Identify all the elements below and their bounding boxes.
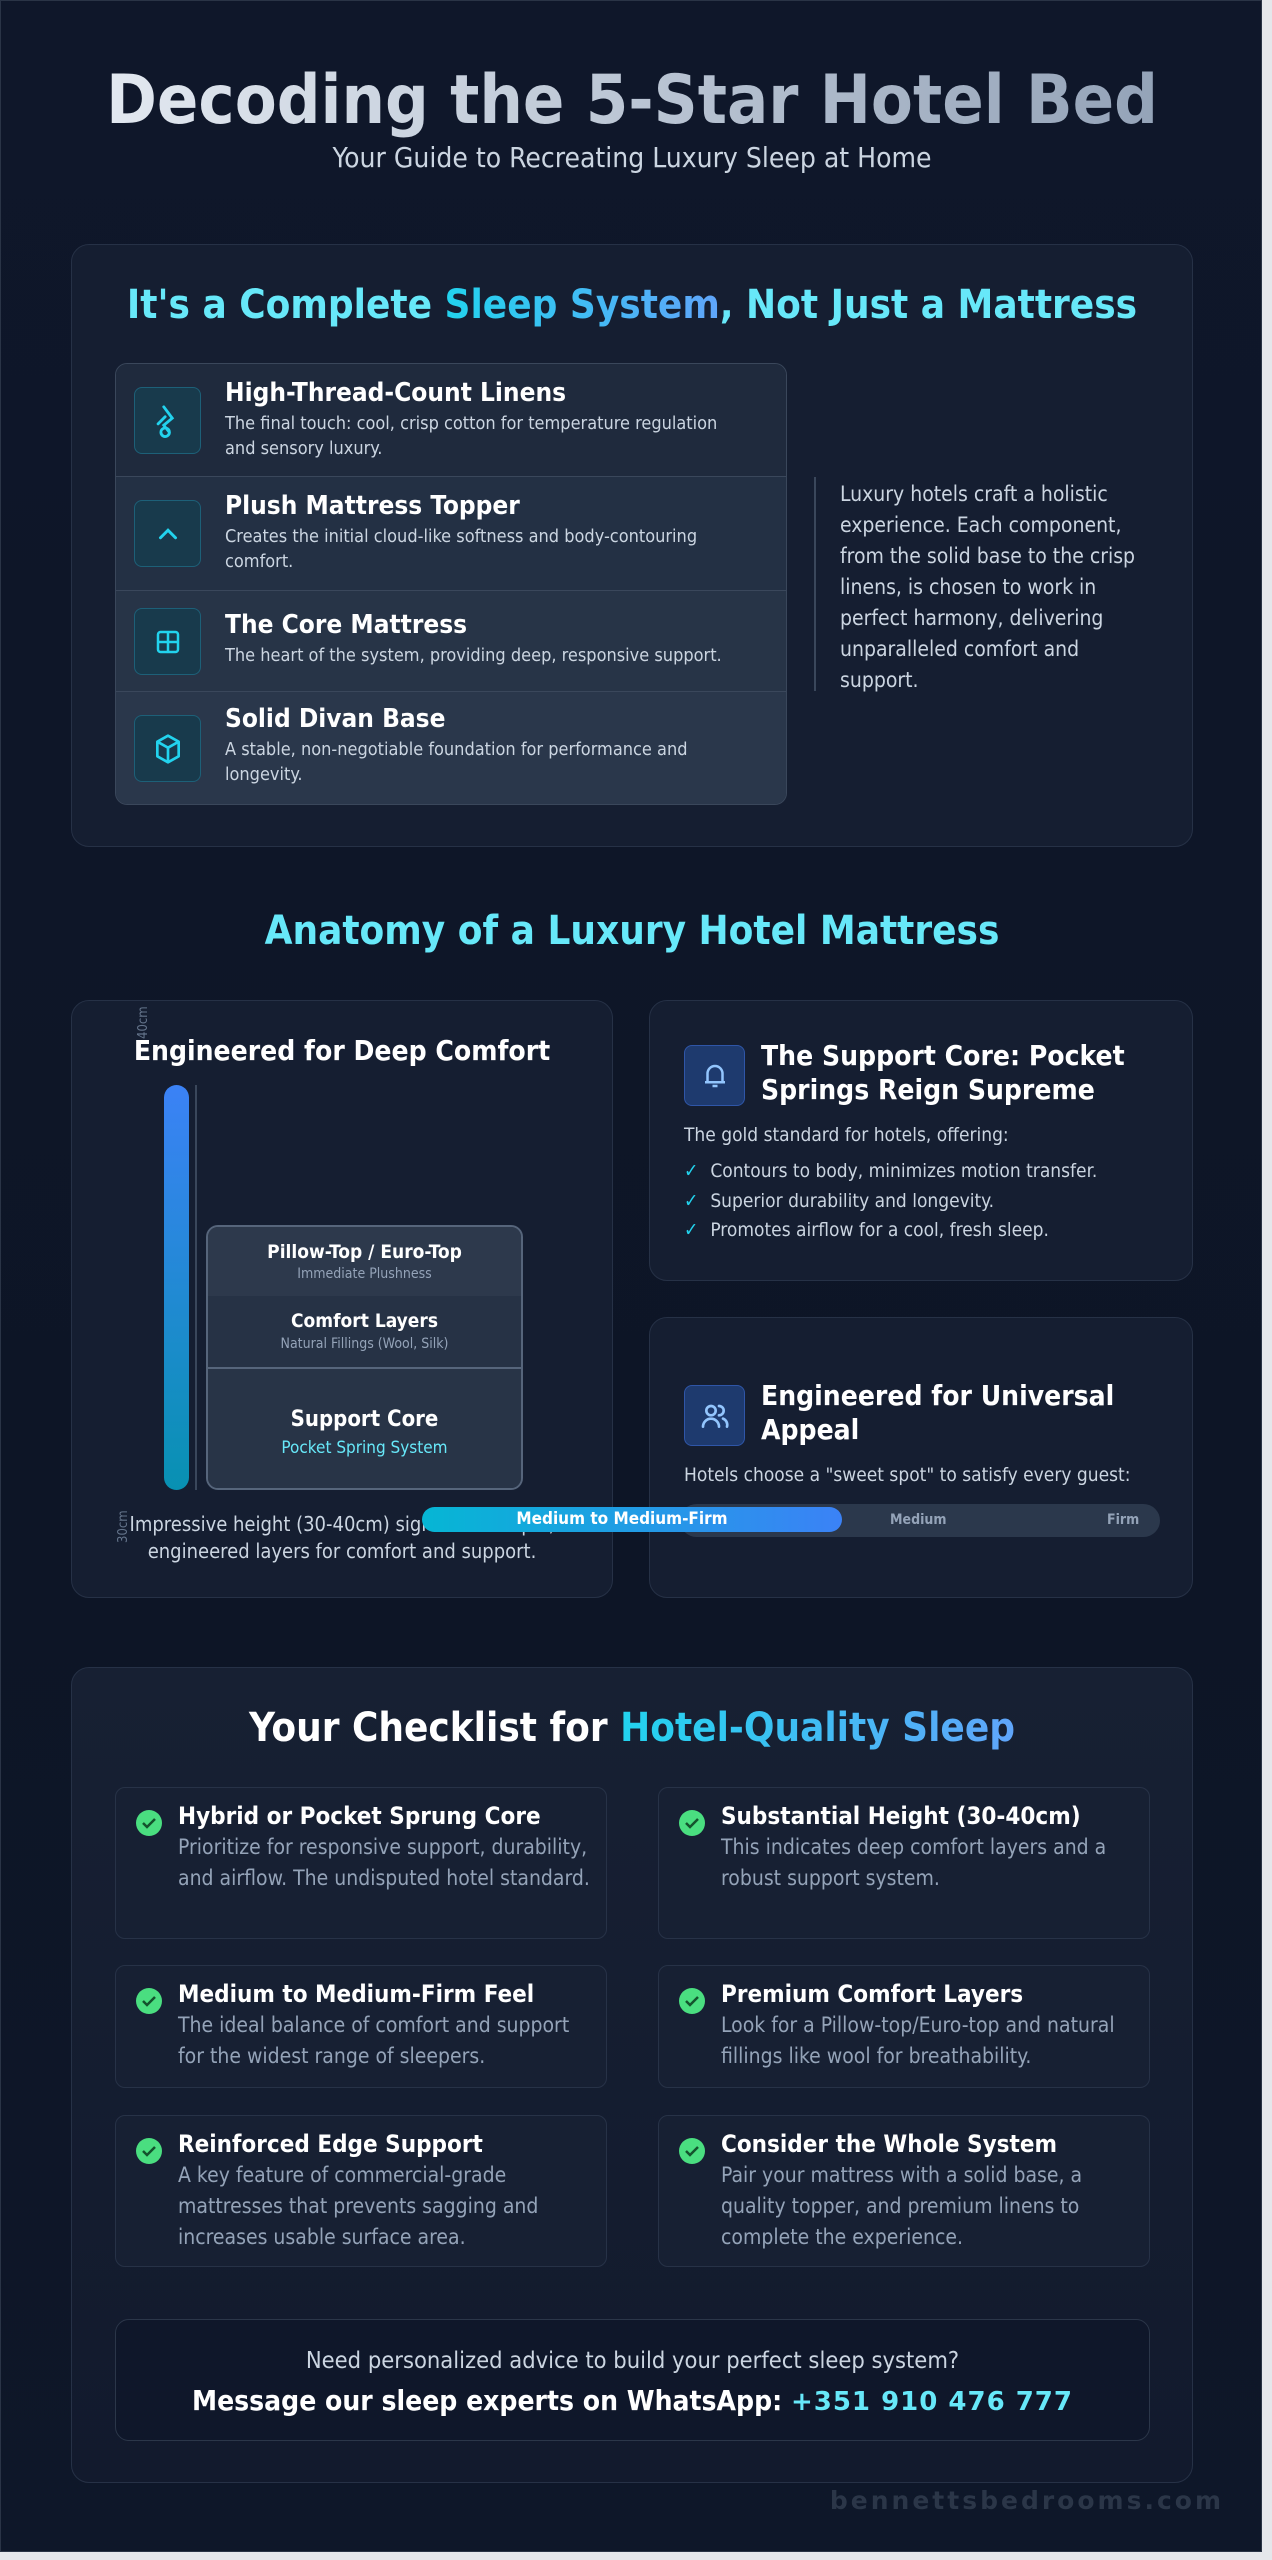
layer list bbox=[115, 363, 787, 805]
item: comfort layers: Premium Comfort Layers bbox=[721, 1980, 1023, 2008]
caption: Impressive height (30-40cm) signifies multiple, engineered layers for comfort and support. bbox=[130, 1512, 554, 1563]
item: comfort layers: Look for a Pillow-top/Euro-top and natural fillings like wool for breathability. bbox=[721, 2013, 1115, 2068]
heading: support core: The Support Core: Pocket Springs Reign Supreme bbox=[761, 1039, 1125, 1106]
text: sweet spot: Hotels choose a "sweet spot" to satisfy every guest: bbox=[684, 1464, 1130, 1486]
heading: checklist: Your Checklist for Hotel-Quality Sleep bbox=[249, 1705, 1015, 1751]
row: core mattress: The heart of the system, providing deep, responsive support. bbox=[225, 645, 722, 666]
row: linens: High-Thread-Count Linens bbox=[225, 378, 566, 408]
item: hybrid core: Hybrid or Pocket Sprung Core bbox=[178, 1802, 541, 1830]
watermark: bennettsbedrooms.com bbox=[830, 2486, 1224, 2515]
callout: whatsapp: Need personalized advice to build your perfect sleep system? bbox=[306, 2346, 959, 2374]
row: divan: Solid Divan Base bbox=[225, 704, 445, 734]
heading: anatomy: Anatomy of a Luxury Hotel Mattress bbox=[265, 908, 999, 954]
row: topper bbox=[116, 477, 786, 591]
item: feel bbox=[115, 1965, 607, 2088]
firmness track bbox=[680, 1504, 1160, 1537]
icon: bell bbox=[684, 1045, 745, 1106]
row: core mattress: The Core Mattress bbox=[225, 610, 467, 640]
item: whole system: Consider the Whole System bbox=[721, 2130, 1057, 2158]
item: edge support: A key feature of commercial-grade mattresses that prevents sagging and increases usable surface area. bbox=[178, 2163, 538, 2249]
firmness track: Firm bbox=[1107, 1512, 1139, 1528]
checklist: benefits bbox=[684, 1160, 1097, 1241]
label: 40cm: 40cm bbox=[136, 1006, 151, 1039]
item: height: Substantial Height (30-40cm) bbox=[721, 1802, 1081, 1830]
layer: comfort: Comfort Layers bbox=[291, 1310, 438, 1332]
checklist: benefits: ✓ Contours to body, minimizes motion transfer. bbox=[684, 1160, 1097, 1182]
row: core mattress bbox=[116, 591, 786, 692]
subtitle: Your Guide to Recreating Luxury Sleep at Home bbox=[332, 141, 932, 174]
checklist: benefits: ✓ Promotes airflow for a cool, fresh sleep. bbox=[684, 1219, 1049, 1241]
panel: support core bbox=[649, 1000, 1193, 1281]
item: height: This indicates deep comfort layers and a robust support system. bbox=[721, 1835, 1106, 1890]
text: holistic experience: Luxury hotels craft a holistic experience. Each component, from the solid base to the crisp linens, is chosen to work in perfect harmony, delivering unparalleled comfort and support. bbox=[840, 482, 1135, 692]
heading: universal appeal: Engineered for Universal Appeal bbox=[761, 1379, 1114, 1446]
row: linens bbox=[116, 364, 786, 477]
callout: whatsapp: Message our sleep experts on WhatsApp: +351 910 476 777 bbox=[192, 2384, 1073, 2417]
row: topper: Plush Mattress Topper bbox=[225, 491, 520, 521]
layer: pillow-top: Immediate Plushness bbox=[297, 1266, 432, 1282]
panel: deep comfort bbox=[71, 1000, 613, 1598]
height bar bbox=[164, 1085, 189, 1490]
item: feel: The ideal balance of comfort and support for the widest range of sleepers. bbox=[178, 2013, 569, 2068]
text: gold standard: The gold standard for hotels, offering: bbox=[684, 1124, 1009, 1146]
layer: support core: Support Core bbox=[291, 1407, 438, 1432]
panel: complete sleep system bbox=[71, 244, 1193, 847]
layer: pillow-top bbox=[208, 1227, 521, 1296]
icon: cube bbox=[134, 715, 201, 782]
heading: sleep system: It's a Complete Sleep System, Not Just a Mattress bbox=[127, 282, 1137, 328]
item: edge support: Reinforced Edge Support bbox=[178, 2130, 483, 2158]
callout: whatsapp bbox=[115, 2319, 1150, 2441]
item: whole system bbox=[658, 2115, 1150, 2267]
checklist: benefits: ✓ Superior durability and longevity. bbox=[684, 1190, 994, 1212]
item: comfort layers bbox=[658, 1965, 1150, 2088]
layer: support core bbox=[208, 1369, 521, 1492]
firmness track: Medium bbox=[890, 1512, 947, 1528]
layer: comfort bbox=[208, 1296, 521, 1369]
panel: checklist bbox=[71, 1667, 1193, 2483]
heading: deep comfort: Engineered for Deep Comfort bbox=[134, 1034, 550, 1067]
item: whole system: Pair your mattress with a solid base, a quality topper, and premium linens to complete the experience. bbox=[721, 2163, 1082, 2249]
icon: users bbox=[684, 1385, 745, 1446]
row: linens: The final touch: cool, crisp cotton for temperature regulation and sensory luxury. bbox=[225, 413, 717, 459]
title: Decoding the 5-Star Hotel Bed bbox=[106, 61, 1158, 140]
row: topper: Creates the initial cloud-like softness and body-contouring comfort. bbox=[225, 526, 697, 572]
item: edge support bbox=[115, 2115, 607, 2267]
layer: comfort: Natural Fillings (Wool, Silk) bbox=[281, 1336, 448, 1352]
item: hybrid core bbox=[115, 1787, 607, 1939]
row: divan: A stable, non-negotiable foundation for performance and longevity. bbox=[225, 739, 688, 785]
icon: grid bbox=[134, 608, 201, 675]
firmness slider pill: Medium to Medium-Firm bbox=[516, 1509, 728, 1529]
icon: chevron bbox=[134, 500, 201, 567]
layer: pillow-top: Pillow-Top / Euro-Top bbox=[267, 1241, 462, 1263]
panel: universal appeal bbox=[649, 1317, 1193, 1598]
icon: linens bbox=[134, 387, 201, 454]
item: feel: Medium to Medium-Firm Feel bbox=[178, 1980, 534, 2008]
mattress layers diagram bbox=[206, 1225, 523, 1490]
item: hybrid core: Prioritize for responsive support, durability, and airflow. The undisputed hotel standard. bbox=[178, 1835, 590, 1890]
row: divan bbox=[116, 692, 786, 806]
layer: support core: Pocket Spring System bbox=[281, 1438, 448, 1458]
firmness slider pill bbox=[422, 1507, 842, 1532]
label: 30cm: 30cm bbox=[116, 1510, 131, 1543]
item: height bbox=[658, 1787, 1150, 1939]
